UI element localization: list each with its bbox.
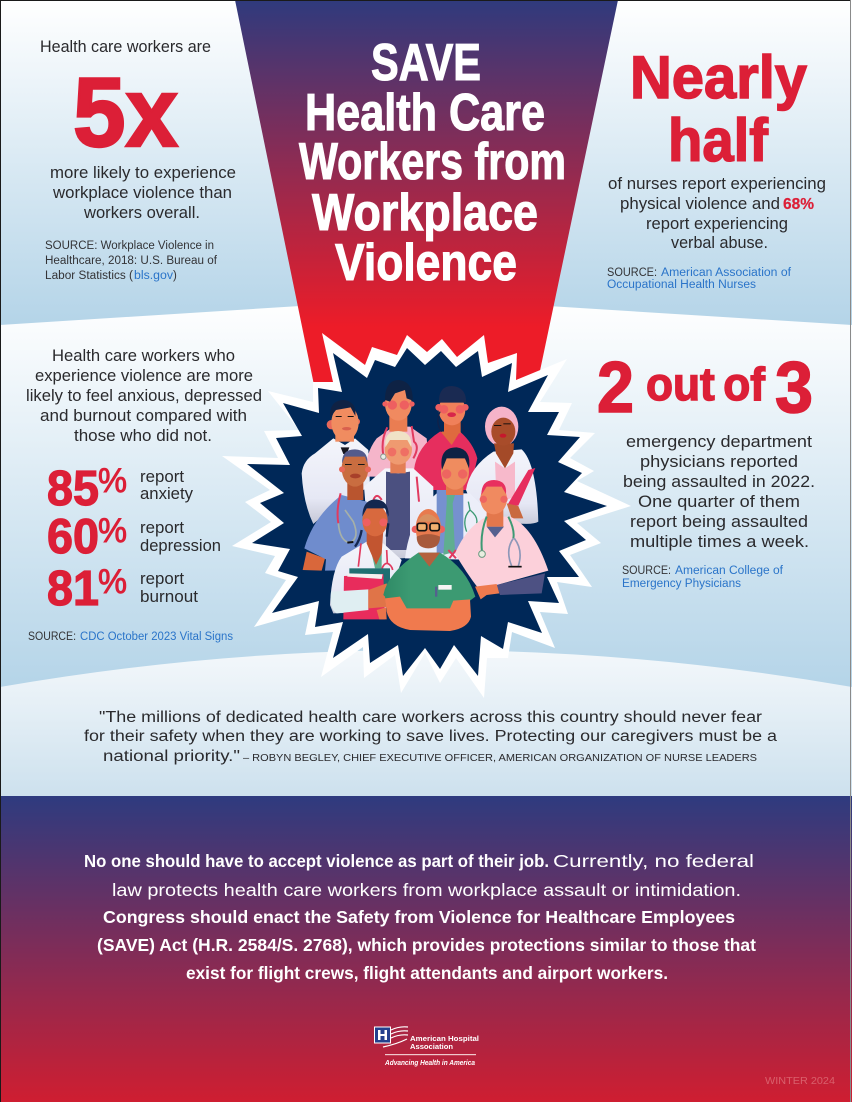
worker: woman in red scrubs, back — [414, 386, 477, 490]
description: 68% — [783, 196, 814, 213]
quote — [84, 709, 777, 765]
worker: man in white coat, back left — [302, 400, 370, 524]
source: Occupational Health Nurses — [607, 279, 756, 291]
quote: national priority." — [103, 748, 240, 765]
source: SOURCE: Workplace Violence in — [45, 240, 214, 252]
worker: blonde man in white coat — [364, 431, 433, 560]
worker: man in blue scrubs — [303, 449, 377, 571]
description: report experiencing — [646, 215, 788, 233]
right frame edge — [850, 0, 851, 1102]
description: report being assaulted — [630, 513, 808, 531]
stat: 60% depression — [47, 510, 221, 564]
big number 5x: 5x — [73, 57, 178, 167]
source — [607, 267, 792, 291]
description: being assaulted in 2022. — [623, 473, 815, 491]
call to action text — [84, 851, 756, 983]
call to action text: law protects health care workers from workplace assault or intimidation. — [112, 880, 741, 900]
source: American College of — [675, 565, 784, 577]
quote: "The millions of dedicated health care workers across this country should never fear — [99, 709, 762, 726]
worker: woman with pink hair and clipboard — [466, 407, 538, 527]
panel: 2 out of 3 statistic — [597, 348, 815, 590]
burst: navy starburst — [247, 348, 607, 676]
big heading: half — [668, 107, 769, 174]
source — [45, 240, 218, 282]
worker: man with green tie — [405, 447, 487, 560]
source: SOURCE: — [607, 267, 657, 279]
panel: quote background — [0, 650, 852, 796]
worker: front man in green scrubs with glasses — [377, 509, 475, 631]
intro text: Health care workers are — [40, 38, 211, 56]
big heading: 3 — [775, 348, 813, 428]
stat: 60% depression: 60 — [47, 510, 99, 564]
stat: 60% depression: report — [140, 519, 184, 537]
intro text: likely to feel anxious, depressed — [26, 387, 262, 405]
description: One quarter of them — [638, 493, 800, 511]
stat: 85% anxiety — [47, 462, 194, 516]
stat: 81% burnout: report — [140, 570, 184, 588]
panel: top background — [0, 0, 852, 325]
panel: call to action — [0, 796, 852, 1102]
source: Healthcare, 2018: U.S. Bureau of — [45, 255, 218, 267]
call to action text: exist for flight crews, flight attendants and airport workers. — [186, 963, 668, 983]
title: Health Care — [305, 84, 545, 142]
intro text: Health care workers who — [52, 347, 235, 365]
panel: 5x statistic — [40, 38, 236, 282]
source: Emergency Physicians — [622, 578, 741, 590]
description: multiple times a week. — [630, 533, 809, 551]
logo: American Hospital Association: Association — [410, 1042, 453, 1051]
title: SAVE — [371, 34, 481, 92]
big heading — [630, 44, 808, 174]
title: Workers from — [299, 133, 566, 191]
description: physicians reported — [640, 453, 798, 471]
call to action text: Congress should enact the Safety from Violence for Healthcare Employees — [103, 907, 735, 927]
stat: 85% anxiety: anxiety — [140, 485, 194, 503]
big heading: out of — [646, 358, 766, 410]
description: emergency department — [626, 433, 812, 451]
logo: American Hospital Association: Advancing Health in America — [384, 1058, 475, 1067]
panel: nearly half statistic — [607, 44, 826, 291]
source: bls.gov — [134, 270, 173, 282]
edition label: WINTER 2024 — [765, 1075, 835, 1087]
source: CDC October 2023 Vital Signs — [80, 631, 233, 643]
description — [623, 433, 815, 551]
logo: American Hospital Association — [374, 1027, 479, 1067]
big heading: 2 — [597, 348, 634, 428]
stat: 81% burnout: 81 — [47, 562, 99, 616]
call to action text: Currently, no federal — [553, 851, 754, 871]
source: Labor Statistics ( — [45, 270, 133, 282]
description — [50, 164, 236, 222]
quote attribution: – ROBYN BEGLEY, CHIEF EXECUTIVE OFFICER, AMERICAN ORGANIZATION OF NURSE LEADERS — [243, 752, 757, 764]
title — [299, 34, 566, 292]
intro text: those who did not. — [74, 427, 212, 445]
big heading: Nearly — [630, 44, 808, 111]
call to action text: (SAVE) Act (H.R. 2584/S. 2768), which provides protections similar to those that — [97, 935, 756, 955]
panel: title funnel — [235, 0, 618, 385]
worker: woman in white coat with red book — [330, 499, 402, 619]
description: verbal abuse. — [671, 234, 768, 252]
stat: 85% anxiety: 85 — [47, 462, 99, 516]
stat: 85% anxiety: % — [98, 462, 127, 500]
title: Violence — [335, 234, 517, 292]
description: physical violence and — [620, 195, 780, 213]
burst: white starburst — [222, 333, 631, 698]
intro text — [26, 347, 262, 445]
description: workers overall. — [83, 204, 200, 222]
stat: 60% depression: depression — [140, 537, 221, 555]
stat: 81% burnout: % — [98, 563, 127, 601]
intro text: experience violence are more — [35, 367, 253, 385]
big heading — [597, 348, 813, 428]
call to action text: No one should have to accept violence as part of their job. — [84, 851, 549, 871]
source: American Association of — [661, 267, 792, 279]
source: SOURCE: — [622, 565, 671, 577]
source: ) — [173, 270, 177, 282]
stat: 81% burnout: burnout — [140, 588, 198, 606]
illustration: group of health care workers — [302, 380, 548, 631]
stat: 60% depression: % — [98, 512, 127, 550]
description: more likely to experience — [50, 164, 236, 182]
source: SOURCE: — [28, 631, 76, 643]
quote: for their safety when they are working to save lives. Protecting our caregivers must be a — [84, 728, 777, 745]
description — [608, 175, 826, 252]
title: Workplace — [312, 184, 538, 242]
description: workplace violence than — [52, 184, 232, 202]
description: of nurses report experiencing — [608, 175, 826, 193]
worker: woman in pink scrubs, back — [365, 380, 430, 477]
stat: 81% burnout — [47, 562, 198, 616]
stat: 85% anxiety: report — [140, 468, 184, 486]
source — [622, 565, 784, 590]
intro text: and burnout compared with — [40, 407, 247, 425]
logo: American Hospital Association: American Hospital — [410, 1034, 479, 1043]
worker: man in pink scrubs — [455, 480, 548, 599]
panel: middle background — [0, 300, 852, 690]
panel: mental health statistics — [26, 347, 262, 643]
